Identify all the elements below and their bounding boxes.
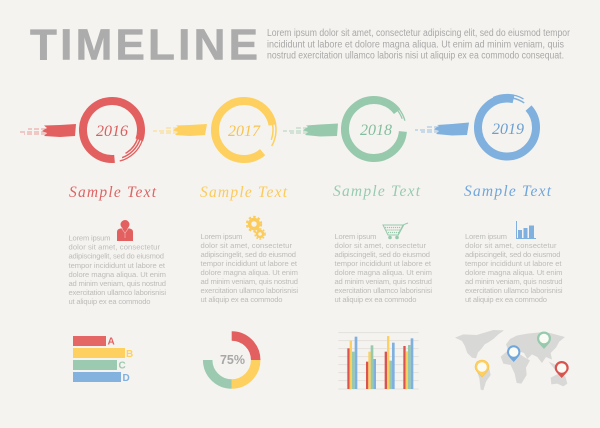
body text column 1: ad minim veniam, quis nostrud [68,279,166,288]
world map with pins [455,330,569,390]
ring 2018 [331,86,417,172]
stacked labelled bars: D [122,373,130,384]
icon: bar chart [516,221,536,238]
body text column 4: ad minim veniam, quis nostrud [465,277,562,286]
body text column 2: dolore magna aliqua. Ut enim [200,268,298,277]
body text column 3: ad minim veniam, quis nostrud [334,277,432,286]
body text column 1: adipiscingelit, sed do eiusmod [68,252,164,260]
label 2017: Sample Text [200,184,288,201]
body text column 1 [68,234,166,306]
pin yellow [475,360,489,377]
milestone 2016 [18,90,157,201]
body text column 2: Lorem ipsum [200,232,242,241]
body text column 3: dolor sit amet, consectetur [334,241,426,250]
body text column 4: tempor incididunt ut labore et [465,259,562,268]
map continents [455,330,567,390]
label 2018: Sample Text [333,183,421,200]
milestone 2017 [153,87,288,201]
body text column 1: dolore magna aliqua. Ut enim [68,270,166,279]
stacked labelled bars: B [126,349,133,360]
body text column 3: ut aliquip ex ea commodo [334,295,416,304]
body text column 4: ut aliquip ex ea commodo [465,295,547,304]
icon: person [117,220,133,241]
body text column 1: exercitation ullamco laborisnisi [68,288,166,297]
body text column 2: tempor incididunt ut labore et [200,259,298,268]
brush stroke 2017 [153,124,207,136]
icon: gears [247,217,265,239]
body text column 2 [200,232,298,304]
body text column 4: Lorem ipsum [465,232,507,241]
title: TIMELINE [30,20,258,70]
body text column 3: exercitation ullamco laborisnisi [334,286,432,295]
stacked labelled bars: A [108,336,115,348]
donut chart [208,336,256,384]
pin blue [507,345,520,362]
body text column 4: dolor sit amet, consectetur [465,241,557,250]
body text column 2: adipiscingelit, sed do eiusmod [200,250,296,259]
stacked labelled bars [73,336,133,384]
ring 2016 [72,90,152,170]
body text column 4: adipiscingelit, sed do eiusmod [465,250,560,259]
body text column 1: Lorem ipsum [68,234,110,242]
header text block: incididunt ut labore et dolore magna aliqua. Ut enim ad minim veniam, quis [267,40,564,50]
header text block: nostrud exercitation ullamco laboris nisi ut aliquip ex ea commodo consequat. [267,50,564,62]
header text block [267,28,571,62]
year 2016: 2016 [96,123,128,140]
body text column 3: Lorem ipsum [334,232,376,241]
body text column 4 [465,232,563,304]
body text column 2: ad minim veniam, quis nostrud [200,277,298,286]
ring 2019 [463,84,551,171]
milestone 2019 [415,84,552,200]
donut chart: 75% [220,353,245,367]
body text column 1: dolor sit amet, consectetur [68,242,160,252]
ring 2017 [201,87,287,173]
brush stroke 2016 [18,124,76,137]
body text column 3: dolore magna aliqua. Ut enim [334,268,432,277]
year 2019: 2019 [492,121,524,138]
pin red [555,361,569,378]
year 2017: 2017 [228,123,261,140]
body text column 1: ut aliquip ex ea commodo [68,297,150,306]
body text column 4: dolore magna aliqua. Ut enim [465,268,562,277]
body text column 3: adipiscingelit, sed do eiusmod [334,250,430,259]
body text column 3 [334,232,432,304]
label 2019: Sample Text [464,183,552,200]
grouped bar chart [338,333,419,389]
milestone 2018 [283,86,421,200]
brush stroke 2019 [415,122,469,136]
stacked labelled bars: C [118,360,126,372]
body text column 4: exercitation ullamco laborisnisi [465,286,563,295]
body text column 2: ut aliquip ex ea commodo [200,295,282,304]
body text column 2: dolor sit amet, consectetur [200,241,292,250]
label 2016: Sample Text [69,184,157,201]
body text column 1: tempor incididunt ut labore et [68,261,166,270]
pin green [537,332,551,349]
body text column 2: exercitation ullamco laborisnisi [200,286,298,295]
body text column 3: tempor incididunt ut labore et [334,259,432,268]
year 2018: 2018 [360,122,392,139]
brush stroke 2018 [283,124,338,136]
icon: shopping cart [383,223,408,239]
